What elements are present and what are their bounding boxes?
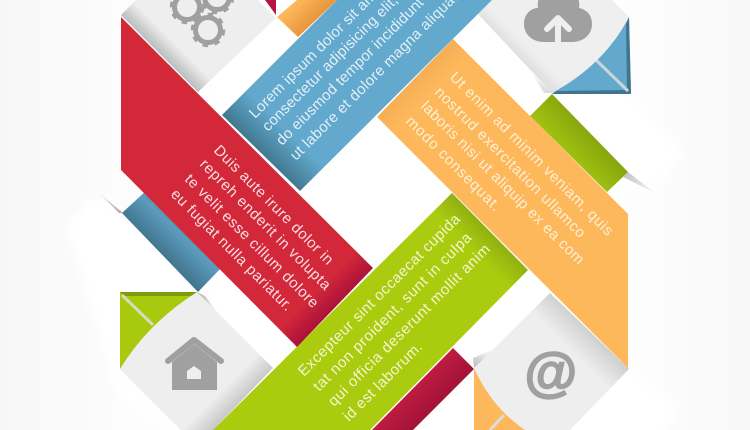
fold shadows xyxy=(98,72,655,368)
text: orange ribbon xyxy=(402,69,617,268)
panel: bottom-left icon tile xyxy=(120,292,273,430)
text: green ribbon: id est laborum. xyxy=(340,339,426,425)
white paper folds xyxy=(66,94,685,430)
icon: gears xyxy=(172,0,232,46)
panel: green ribbon xyxy=(213,193,528,430)
icon: at sign: @ xyxy=(524,343,576,403)
text: red ribbon: te velit esse cillum dolore xyxy=(181,171,322,312)
panel: top-left icon tile xyxy=(121,0,276,92)
text: orange ribbon: Ut enim ad minim veniam, quis xyxy=(446,69,617,239)
ribbon: dark red lower piece xyxy=(372,348,474,430)
text: green ribbon xyxy=(295,210,494,425)
text: orange ribbon: modo consequat. xyxy=(402,113,504,215)
blue envelope corner xyxy=(552,17,631,94)
icon: house xyxy=(168,340,221,390)
ribbon: green upper piece xyxy=(530,94,628,192)
orange envelope corner xyxy=(474,369,532,430)
text: green ribbon: qui officia deserunt mollit anim xyxy=(325,241,494,410)
panel: bottom-right icon tile xyxy=(474,293,629,430)
text: orange ribbon: nostrud exercitation ullamco xyxy=(431,84,589,241)
panel: orange ribbon xyxy=(377,39,628,368)
panel: blue ribbon xyxy=(222,0,492,191)
text: red ribbon: eu fugiat nulla pariatur. xyxy=(167,186,296,315)
ribbon: orange top end xyxy=(277,0,337,37)
green envelope corner xyxy=(120,292,197,369)
panel: top-right icon tile xyxy=(478,0,631,94)
text: green ribbon: Excepteur sint occaecat cupida xyxy=(295,210,464,380)
text: orange ribbon: laboris nisi ut aliquip ex ea com xyxy=(417,98,588,268)
icon: cloud upload xyxy=(524,0,592,43)
panel: red ribbon xyxy=(121,17,373,347)
ribbon: dark red top end xyxy=(265,0,276,15)
text: red ribbon: Duis aute irure dolor in xyxy=(210,142,337,268)
text: red ribbon: repreh enderit in volupta xyxy=(196,156,335,294)
text: green ribbon: tat non proident, sunt in culpa xyxy=(310,229,476,395)
ribbon: blue lower piece xyxy=(122,190,221,292)
text: red ribbon xyxy=(167,142,337,315)
